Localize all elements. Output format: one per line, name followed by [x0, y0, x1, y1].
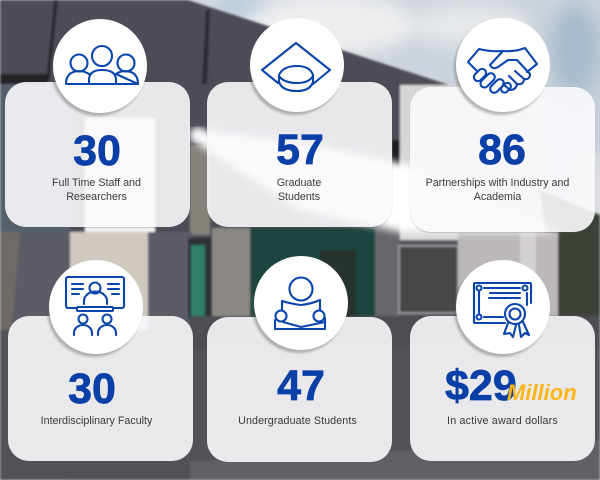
- label: partnerships: [426, 177, 569, 203]
- label: graduate students: Students: [278, 191, 320, 203]
- label: full time staff: Full Time Staff and: [52, 177, 141, 189]
- label: full time staff: Researchers: [66, 191, 127, 203]
- label: graduate students: Graduate: [277, 177, 321, 189]
- icon: certificate with ribbon: [456, 260, 550, 354]
- panel: award card: [410, 316, 595, 461]
- label: full time staff: [52, 177, 141, 203]
- number: 86 partnerships: 86: [478, 126, 526, 174]
- number: 47 undergraduate: 47: [277, 362, 325, 410]
- panel: graduate card: [207, 82, 392, 227]
- label: partnerships: Academia: [474, 191, 521, 203]
- label: interdisciplinary faculty: Interdisciplinary Faculty: [41, 415, 152, 427]
- panel: staff card: [5, 82, 190, 227]
- icon: people group: [53, 19, 147, 113]
- panel: partnerships card: [410, 87, 595, 232]
- icon: presenter on screen with audience: [49, 260, 143, 354]
- icon: person reading: [254, 256, 348, 350]
- icon: handshake: [456, 18, 550, 112]
- panel: undergraduate card: [207, 317, 392, 462]
- number: 30 faculty: 30: [68, 365, 116, 413]
- number suffix: Million: Million: [507, 380, 577, 405]
- number: 30 staff: 30: [73, 127, 121, 175]
- light beam from sun: [195, 130, 560, 232]
- number: $29: $29: [445, 362, 517, 410]
- panel: faculty card: [8, 316, 193, 461]
- icon: graduation cap: [250, 18, 344, 112]
- label: partnerships: Partnerships with Industry and: [426, 177, 569, 189]
- label: graduate students: [277, 177, 321, 203]
- number: 57 graduate: 57: [276, 126, 324, 174]
- label: undergraduate students: Undergraduate Students: [238, 415, 357, 427]
- label: active award dollars: In active award dollars: [447, 415, 558, 427]
